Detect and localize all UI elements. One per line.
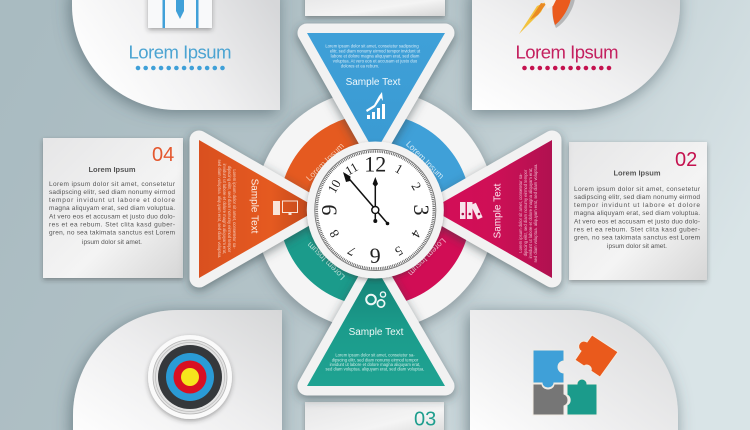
- card: step 02: [569, 142, 707, 280]
- card body text: ipsum dolor sit amet.: [607, 243, 667, 250]
- triangle: left orange: [199, 140, 319, 278]
- icon: target: [148, 335, 232, 419]
- triangle: right magenta: [431, 140, 552, 278]
- clock numbers: 11: [342, 159, 361, 178]
- tiny text: dolores et ea rebum.: [341, 64, 379, 68]
- tiny text: voluptua. At vero eos et accusam et justo duo: [333, 58, 418, 64]
- dots: blue row: [138, 66, 222, 70]
- triangle: top blue: [307, 33, 445, 153]
- card body text: Lorem ipsum dolor sit amet, consetetur: [49, 181, 176, 188]
- number: 04: 04: [152, 144, 174, 166]
- card body text: At vero eos et accusam et justo duo dolo-: [49, 213, 175, 220]
- heading: Lorem Ipsum blue: Lorem Ipsum: [128, 42, 232, 62]
- number: 02: 02: [675, 149, 697, 171]
- tiny text: [326, 352, 424, 372]
- card body text: [49, 181, 176, 246]
- card: step 04: [43, 138, 183, 278]
- card body text: gren, no sea takimata sanctus est Lorem: [574, 234, 700, 242]
- card body text: Lorem ipsum dolor sit amet, consetetur: [574, 186, 701, 193]
- clock numbers: 7: [345, 243, 358, 259]
- ring: four coloured quadrants: [279, 114, 471, 306]
- card body text: res et ea rebum. Stet clita kasd guber-: [49, 221, 175, 228]
- card body text: gren, no sea takimata sanctus est Lorem: [49, 230, 175, 236]
- label: Sample Text: Sample Text: [248, 179, 260, 234]
- clock numbers: 2: [408, 180, 425, 193]
- clock numbers: 10: [324, 177, 344, 196]
- number: 03: 03: [414, 408, 436, 430]
- white disc behind ring: [255, 90, 495, 330]
- clock numbers: 8: [326, 227, 342, 240]
- ring label: orange: Lorem Ipsum: [304, 141, 346, 183]
- tiny text: [217, 160, 237, 258]
- tiny text: labore et dolore magna aliquyam erat, sed diam: [331, 54, 420, 58]
- card body text: ipsum dolor sit amet.: [82, 239, 142, 246]
- icon: rocket: [519, 0, 575, 34]
- clock hands: [343, 172, 389, 225]
- ring label: blue: Lorem Ipsum: [404, 139, 446, 181]
- tiny text: [518, 164, 538, 262]
- tiny text: elitr, sed diam nonumy eirmod tempor invidunt ut: [330, 48, 421, 54]
- tiny text: sed diam voluptua. aliquyam erat, sed diam voluptua.: [217, 160, 222, 258]
- tiny text: invidunt ut labore et dolore magna aliquyam erat,: [222, 164, 227, 254]
- card: top sliver: [305, 0, 445, 16]
- label: Sample Text: Sample Text: [492, 183, 504, 238]
- tiny text: Lorem ipsum dolor sit amet, consetetur sadipscing: [325, 44, 419, 48]
- panel: bottom left quarter with target icon: [73, 310, 282, 430]
- tiny text: Lorem ipsum dolor sit amet, consetetur sa-: [232, 169, 237, 249]
- icon: shirt and tie: [148, 0, 212, 28]
- clock numbers: 9: [317, 204, 342, 216]
- tiny text: Lorem ipsum dolor sit amet, consetetur sa-: [335, 352, 415, 358]
- icon: computer: [273, 201, 298, 215]
- card body text: magna aliquyam erat, sed diam voluptua.: [49, 205, 175, 212]
- clock: [307, 142, 444, 278]
- clock numbers: 12: [364, 151, 386, 176]
- tiny text: dipscing elitr, sed diam nonumy eirmod tempor: [227, 166, 232, 253]
- card body text: [574, 186, 701, 250]
- clock numbers: [317, 151, 434, 269]
- icon: gears: [366, 292, 386, 307]
- card heading: Lorem Ipsum: [88, 165, 136, 174]
- panel: bottom right quarter with puzzle icon: [470, 310, 678, 430]
- icon: chart: [366, 92, 385, 119]
- icon: binders: [460, 202, 483, 220]
- clock numbers: 5: [393, 243, 406, 259]
- tiny text: Lorem ipsum dolor sit amet, consetetur sa-: [518, 173, 523, 253]
- card: step 03: [305, 402, 444, 430]
- tiny text: sed diam voluptua. aliquyam erat, sed diam voluptua.: [326, 366, 424, 372]
- triangle: bottom teal: [307, 266, 445, 386]
- dots: magenta row: [524, 66, 609, 70]
- tiny text: dipscing elitr, sed diam nonumy eirmod tempor: [523, 169, 528, 256]
- clock numbers: 4: [408, 227, 425, 241]
- ring label: magenta: Lorem Ipsum: [406, 236, 448, 278]
- clock numbers: 3: [409, 204, 434, 216]
- card body text: At vero eos et accusam et justo duo dolo-: [574, 218, 700, 225]
- label: Sample Text: Sample Text: [349, 327, 404, 338]
- card body text: magna aliquyam erat, sed diam voluptua.: [574, 210, 700, 217]
- tiny text: invidunt ut labore et dolore magna aliquyam erat,: [330, 362, 420, 367]
- label: Sample Text: Sample Text: [346, 77, 401, 88]
- card body text: sadipscing elitr, sed diam nonumy eirmod: [49, 189, 175, 196]
- card heading: Lorem Ipsum: [613, 168, 661, 178]
- card body text: tempor invidunt ut labore et dolore: [574, 202, 700, 209]
- card body text: sadipscing elitr, sed diam nonumy eirmod: [574, 194, 700, 201]
- tiny text: [325, 44, 421, 68]
- card body text: res et ea rebum. Stet clita kasd guber-: [574, 226, 700, 233]
- card body text: tempor invidunt ut labore et dolore: [49, 197, 175, 204]
- tiny text: invidunt ut labore et dolore magna aliquyam erat,: [528, 168, 533, 258]
- ring label: teal: Lorem Ipsum: [305, 240, 347, 282]
- icon: puzzle: [533, 335, 618, 415]
- clock numbers: 1: [393, 161, 406, 177]
- panel: top right quarter with rocket icon: [472, 0, 680, 110]
- tiny text: sed diam voluptua. aliquyam erat, sed diam voluptua.: [533, 164, 538, 262]
- panel: top left quarter with shirt icon: [72, 0, 280, 110]
- heading: Lorem Ipsum magenta: Lorem Ipsum: [516, 42, 618, 62]
- clock numbers: 6: [370, 244, 381, 269]
- tiny text: dipscing elitr, sed diam nonumy eirmod tempor: [332, 358, 419, 362]
